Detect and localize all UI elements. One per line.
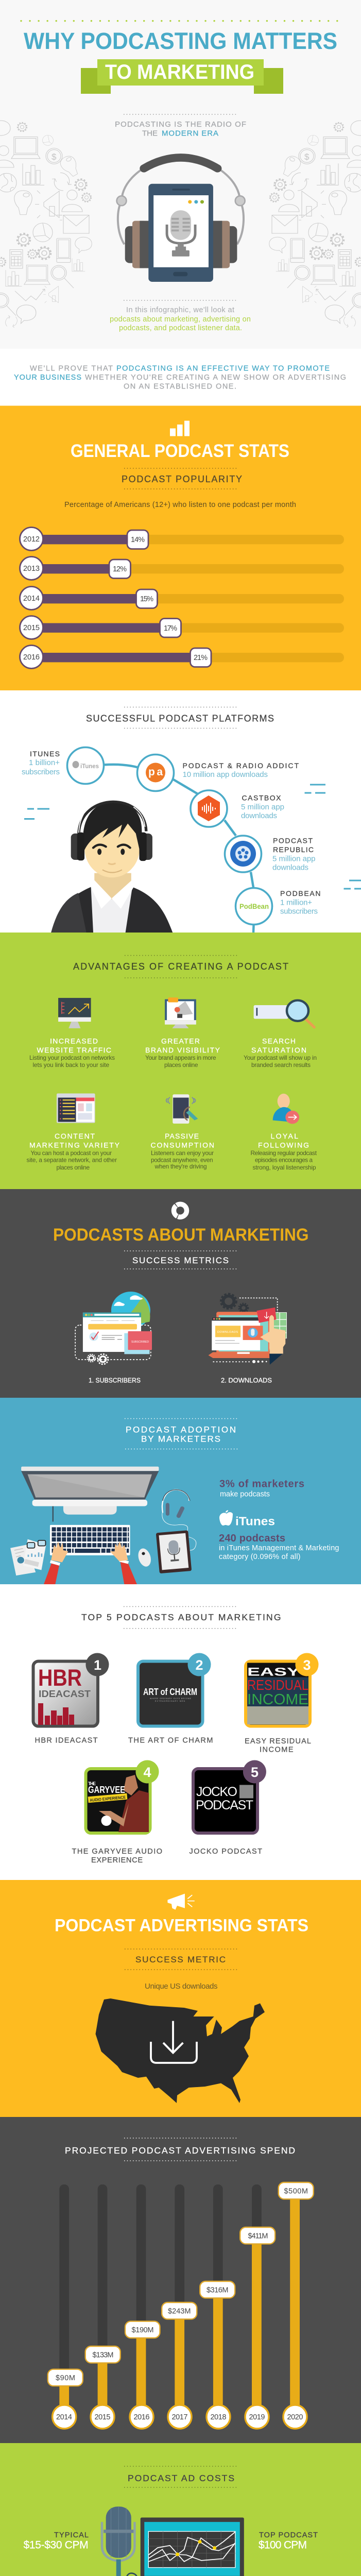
advantage: website traffic: Listing your podcast on networks [29, 1054, 115, 1061]
illustration: subscribers [75, 1292, 152, 1364]
advantage: search saturation: branded search results [251, 1061, 311, 1069]
logo: itunes white: iTunes [235, 1515, 275, 1528]
icon: browser code [57, 1093, 95, 1123]
icon: dollar coins [51, 152, 310, 162]
panel: top 5 podcasts about marketing [0, 1584, 361, 1880]
heading: podcast advertising stats: PODCAST ADVERTISING STATS [55, 1916, 308, 1936]
bar chart: spend by year: 2015 [95, 2413, 110, 2421]
advantage: website traffic: INCREASED [50, 1037, 98, 1045]
podcast cover 1: hbr ideacast [33, 1653, 109, 1726]
bar chart: popularity by year: 21% [194, 654, 208, 662]
podcast cover 3: easy residual income: RESIDUAL [247, 1677, 308, 1693]
podcast cover 4: garyvee: THE [88, 1781, 96, 1786]
bar chart: spend by year: $243M [168, 2307, 191, 2315]
advantage: content marketing variety: MARKETING VARIETY [29, 1141, 120, 1149]
podcast cover 4: garyvee: AUDIO EXPERIENCE [90, 1795, 126, 1803]
bar chart: spend by year: 2020 [287, 2413, 303, 2421]
tagline: PODCASTING IS THE RADIO OF [115, 120, 246, 129]
podcast names row 2: JOCKO PODCAST [190, 1848, 262, 1856]
advantage: passive consumption: when they're driving [154, 1163, 207, 1170]
bar chart: spend by year: 2019 [249, 2413, 265, 2421]
icon: doodle cluster right [269, 121, 361, 328]
platform labels: PODCAST [273, 837, 313, 845]
stat: top podcast cpm: TOP PODCAST [259, 2531, 318, 2539]
stat: top podcast cpm: $100 CPM [259, 2539, 307, 2551]
advantage: content marketing variety: site, a separate network, and other [27, 1157, 117, 1164]
podcast cover 3: easy residual income: INCOME [247, 1691, 308, 1708]
panel: advantages of creating a podcast [0, 933, 361, 1189]
panel: intro hero [0, 0, 361, 349]
label: 1 subscribers: 1. SUBSCRIBERS [89, 1376, 141, 1384]
illustration: man with headphones [51, 802, 173, 933]
subheading: success metrics: SUCCESS METRICS [132, 1256, 229, 1265]
bar chart: spend by year: $90M [56, 2374, 75, 2382]
podcast cover 5: jocko: JOCKO [196, 1785, 237, 1799]
platform labels: CASTBOX [242, 794, 281, 802]
panel: thesis statement: ON AN ESTABLISHED ONE. [124, 383, 236, 391]
podcast cover 2: art of charm: WHERE ORDINARY GUYS BECOME [150, 1698, 192, 1700]
platform labels: 5 million app [272, 855, 315, 863]
bar chart: popularity by year: 15% [140, 595, 153, 603]
podcast names row 1: INCOME [260, 1745, 294, 1754]
platform labels: 1 billion+ [29, 758, 60, 767]
stat: 3 percent of marketers: 3% of marketers [219, 1478, 304, 1489]
bar chart: spend by year [48, 2182, 314, 2429]
stat: 240 podcasts [219, 1533, 339, 1561]
podcast cover 5: jocko: 5 [251, 1765, 259, 1780]
bar chart: spend by year: $411M [248, 2232, 268, 2240]
advantage: website traffic: lets you link back to your site [33, 1061, 109, 1069]
illustration: downloads [209, 1294, 287, 1365]
advantage: loyal following [250, 1132, 317, 1171]
panel: thesis statement: PODCASTING IS AN EFFECTIVE WAY TO PROMOTE [116, 365, 330, 373]
connector path [105, 765, 254, 933]
platform labels: subscribers [280, 907, 318, 916]
panel: thesis statement: YOUR BUSINESS [14, 374, 81, 382]
platform labels: ITUNES [30, 750, 60, 758]
advantage: passive consumption: podcast anywhere, even [151, 1157, 213, 1164]
podcast cover 4: garyvee: GARYVEE [88, 1785, 125, 1795]
advantage: passive consumption: Listeners can enjoy your [151, 1149, 214, 1157]
advantage: brand visibility [145, 1037, 220, 1069]
advantage: brand visibility: places online [164, 1061, 198, 1069]
platform labels: 1 million+ [280, 899, 312, 907]
podcast cover 5: jocko [193, 1760, 266, 1833]
podcast cover 4: garyvee [85, 1760, 159, 1833]
map: united states with download icon [96, 1998, 265, 2103]
bar chart: spend by year: 2017 [172, 2413, 187, 2421]
logo: itunes white [219, 1510, 275, 1528]
ribbon: to marketing: TO MARKETING [105, 61, 254, 83]
platform labels: subscribers [22, 768, 60, 776]
podcast cover 3: easy residual income: 3 [303, 1657, 311, 1673]
bar chart: popularity by year [20, 528, 344, 669]
advantage: content marketing variety: places online [57, 1164, 90, 1171]
advantage: content marketing variety [27, 1132, 120, 1171]
illustration: desk top view [10, 1467, 196, 1584]
heading: general podcast stats: GENERAL PODCAST STATS [71, 441, 289, 461]
podcast cover 2: art of charm: 2 [196, 1657, 203, 1673]
advantage: search saturation: Your podcast will show up in [244, 1054, 317, 1061]
bar chart: popularity by year: 2016 [23, 653, 40, 662]
chart caption: Percentage of Americans (12+) who listen to one podcast per month [64, 501, 296, 509]
illustration: monitor with line chart [141, 2518, 244, 2576]
heading: ad costs: PODCAST AD COSTS [128, 2473, 234, 2483]
bar chart: spend by year: $133M [93, 2351, 113, 2360]
bar chart: popularity by year: 2015 [23, 624, 40, 632]
panel: podcast adoption by marketers [0, 1398, 361, 1584]
advantage: loyal following: LOYAL [271, 1132, 298, 1140]
heading: podcast adoption: PODCAST ADOPTION [126, 1425, 236, 1434]
bar chart: popularity by year: 2013 [23, 565, 40, 573]
logo: podbean: PodBean [239, 902, 269, 910]
caption: unique us downloads: Unique US downloads [145, 1982, 217, 1991]
podcast cover 1: hbr ideacast: HBR [38, 1665, 82, 1691]
stat: top podcast cpm [259, 2531, 318, 2551]
advantage: website traffic [29, 1037, 115, 1069]
platform labels: downloads [272, 863, 308, 872]
intro copy: In this infographic, we'll look at [126, 306, 234, 314]
bar chart: popularity by year: 17% [164, 624, 177, 633]
advantage: passive consumption: CONSUMPTION [150, 1141, 214, 1149]
bar chart: spend by year: $190M [132, 2326, 153, 2334]
podcast names row 1: HBR IDEACAST [35, 1736, 98, 1744]
icon: dollar coins: $ [51, 152, 57, 162]
advantage: brand visibility: GREATER [161, 1037, 200, 1045]
stat: 240 podcasts: in iTunes Management & Marketing [219, 1544, 339, 1552]
icon: donut chart [174, 1204, 186, 1217]
panel: thesis statement: WE'LL PROVE THAT [30, 365, 113, 373]
intro copy [110, 306, 251, 332]
bar chart: popularity by year: 2014 [23, 595, 40, 603]
logo: podcast addict [146, 762, 165, 782]
platform labels: downloads [241, 811, 277, 820]
platform labels: REPUBLIC [273, 845, 314, 854]
podcast cover 3: easy residual income: EASY [247, 1666, 300, 1679]
heading: podcasts about marketing: PODCASTS ABOUT MARKETING [53, 1225, 309, 1245]
icon: bars [170, 421, 190, 436]
podcast names row 1: EASY RESIDUAL [245, 1737, 311, 1745]
stat: 3 percent of marketers [219, 1478, 304, 1498]
platform circles [67, 747, 272, 924]
panel: thesis statement [0, 349, 361, 406]
icon: phone with earpiece [166, 1094, 198, 1124]
subheading: success metric: SUCCESS METRIC [135, 1955, 226, 1964]
logo: podcast addict: pa [148, 766, 163, 778]
tagline [115, 120, 246, 138]
icon: megaphone [167, 1894, 195, 1910]
illustration: microphone [102, 2506, 182, 2576]
advantage: loyal following: Releasing regular podcast [250, 1149, 317, 1157]
podcast cover 5: jocko: PODCAST [196, 1798, 253, 1812]
intro copy: podcasts, and podcast listener data. [119, 324, 242, 332]
label inside illustration: download button: DOWNLOADS [217, 1331, 238, 1334]
advantage: content marketing variety: CONTENT [55, 1132, 95, 1140]
advantage: content marketing variety: You can host a podcast on your [31, 1149, 112, 1157]
platform labels: 10 million app downloads [182, 770, 268, 779]
advantage: brand visibility: Your brand appears in more [145, 1054, 216, 1061]
bar chart: popularity by year: 2012 [23, 535, 40, 544]
decorative dashes [24, 785, 361, 889]
stat: typical cpm [24, 2531, 89, 2551]
advantage: passive consumption [150, 1132, 214, 1170]
tagline: THE [142, 129, 158, 138]
platform labels: PODCAST & RADIO ADDICT [182, 761, 299, 770]
heading: podcast adoption: BY MARKETERS [141, 1434, 220, 1444]
heading: platforms: SUCCESSFUL PODCAST PLATFORMS [86, 714, 274, 724]
podcast names row 1 [35, 1736, 311, 1754]
panel: podcast advertising stats [0, 1880, 361, 2117]
advantage: search saturation: SATURATION [251, 1046, 306, 1054]
title: WHY PODCASTING MATTERS [24, 28, 337, 54]
podcast cover 1: hbr ideacast: IDEACAST [39, 1689, 91, 1699]
panel: thesis statement: WHETHER YOU'RE CREATING A NEW SHOW OR ADVERTISING [85, 374, 346, 382]
panel: successful podcast platforms [0, 690, 361, 933]
stat: typical cpm: TYPICAL [54, 2531, 89, 2539]
logo: podcast republic [230, 841, 256, 867]
advantage: passive consumption: PASSIVE [165, 1132, 199, 1140]
platform labels: PODBEAN [280, 889, 320, 897]
podcast names row 1: THE ART OF CHARM [128, 1736, 213, 1744]
podcast cover 2: art of charm: EXTRAORDINARY MEN [155, 1700, 185, 1702]
tagline: MODERN ERA [162, 129, 218, 138]
advantage: search saturation [244, 1037, 317, 1069]
podcast names row 2 [72, 1848, 262, 1865]
icon: doodle cluster left [0, 121, 92, 328]
bar chart: popularity by year: 12% [113, 565, 127, 573]
advantage: loyal following: episodes encourages a [255, 1157, 313, 1164]
podcast cover 2: art of charm [138, 1653, 211, 1726]
bar chart: spend by year: 2018 [210, 2413, 227, 2421]
bar chart: spend by year: 2014 [56, 2413, 72, 2421]
stat: 240 podcasts: 240 podcasts [219, 1533, 285, 1544]
label inside illustration: subscribed: SUBSCRIBED [131, 1341, 149, 1344]
advantage: brand visibility: BRAND VISIBILITY [145, 1046, 220, 1054]
heading: top 5: TOP 5 PODCASTS ABOUT MARKETING [81, 1612, 281, 1622]
panel: podcast ad costs [0, 2443, 361, 2576]
podcast cover 4: garyvee: 4 [143, 1765, 151, 1780]
advantage: loyal following: FOLLOWING [258, 1141, 309, 1149]
panel: podcasts about marketing [0, 1189, 361, 1398]
platform labels: 5 million app [241, 803, 284, 811]
icon: dollar coins: $ [304, 152, 310, 162]
podcast names row 2: EXPERIENCE [91, 1856, 143, 1865]
advantage: loyal following: strong, loyal listenership [252, 1164, 316, 1171]
icon: following person [273, 1094, 299, 1124]
bar chart: popularity by year: 14% [131, 536, 145, 544]
stat: 3 percent of marketers: make podcasts [220, 1490, 270, 1498]
ribbon: to marketing [81, 59, 283, 94]
stat: 240 podcasts: category (0.096% of all) [219, 1553, 301, 1561]
bar chart: spend by year: 2016 [134, 2413, 149, 2421]
panel: general podcast stats [0, 406, 361, 690]
heading: projected spend: PROJECTED PODCAST ADVERTISING SPEND [65, 2145, 295, 2156]
icon: search [254, 1001, 314, 1027]
label: 2 downloads: 2. DOWNLOADS [221, 1376, 272, 1384]
icon: brand visibility monitor [165, 997, 196, 1028]
platform labels [22, 750, 320, 916]
stat: typical cpm: $15-$30 CPM [24, 2539, 89, 2551]
panel: projected podcast advertising spend [0, 2117, 361, 2443]
heading: advantages: ADVANTAGES OF CREATING A PODCAST [73, 961, 288, 972]
podcast cover 2: art of charm: ART of CHARM [143, 1687, 197, 1697]
logo: itunes [72, 761, 99, 770]
podcast cover 1: hbr ideacast: 1 [94, 1657, 101, 1673]
logo: itunes: iTunes [80, 762, 99, 770]
intro copy: podcasts about marketing, advertising on [110, 315, 251, 324]
subheading: podcast popularity: PODCAST POPULARITY [122, 474, 242, 484]
heading: podcast adoption [126, 1425, 236, 1444]
advantage: website traffic: WEBSITE TRAFFIC [37, 1046, 111, 1054]
podcast names row 2: THE GARYVEE AUDIO [72, 1848, 162, 1856]
bar chart: spend by year: $316M [207, 2286, 229, 2295]
illustration: headphones and phone [117, 158, 245, 282]
bar chart: spend by year: $500M [284, 2188, 308, 2196]
icon: traffic monitor [58, 998, 91, 1028]
advantage: search saturation: SEARCH [262, 1037, 296, 1045]
podcast cover 3: easy residual income [246, 1653, 318, 1726]
logo: castbox [198, 795, 220, 821]
